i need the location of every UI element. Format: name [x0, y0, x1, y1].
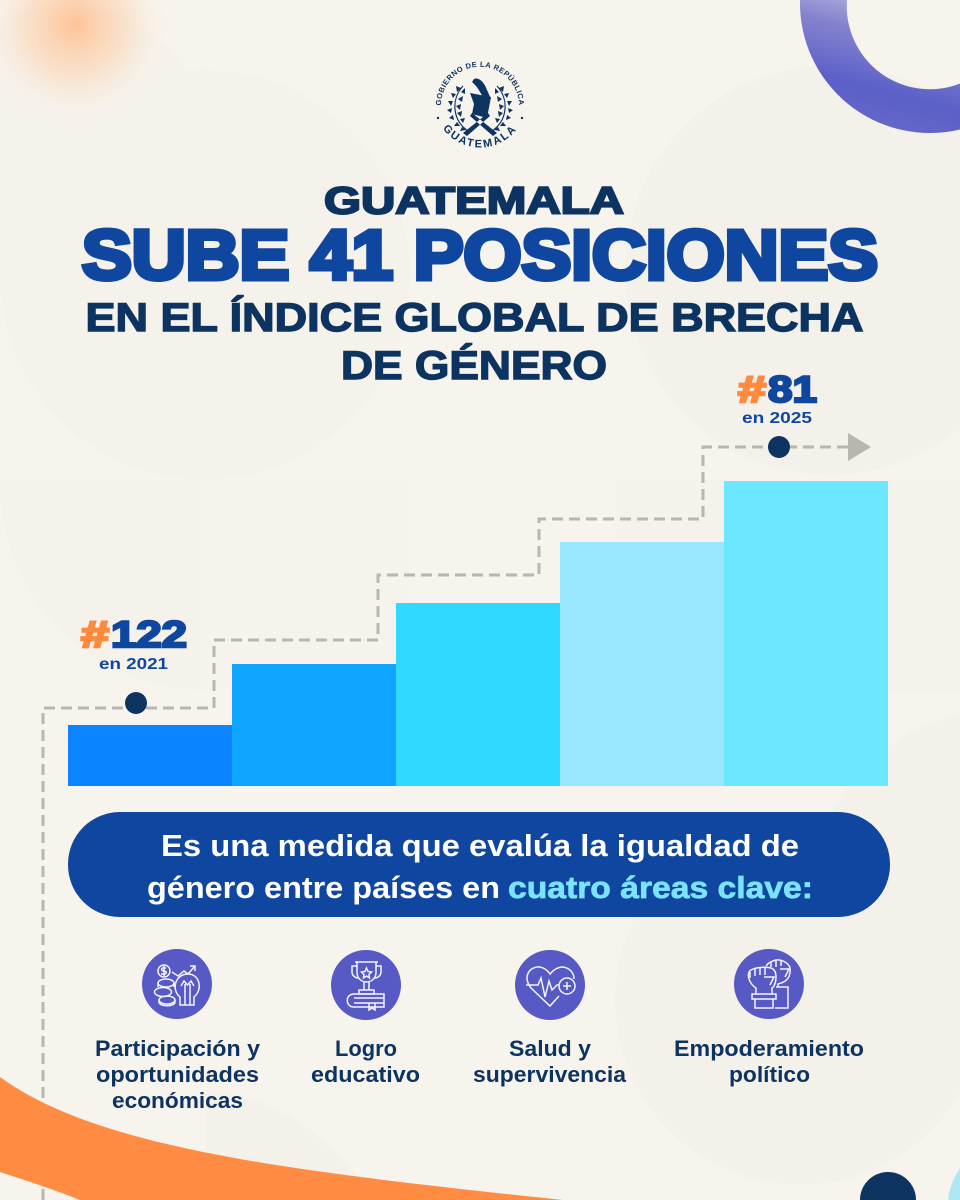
decoration: orange swoosh	[0, 1077, 563, 1200]
marker: end dot	[768, 436, 790, 458]
callout text: cuatro áreas clave:	[508, 870, 813, 905]
decoration: navy circle	[860, 1172, 916, 1200]
icon: trophy and book	[331, 950, 401, 1020]
label: #81 in 2025: en 2025	[742, 410, 812, 427]
decoration: orange glow	[0, 0, 175, 125]
label: #122 in 2021: en 2021	[99, 656, 168, 673]
label: #122 in 2021: 122	[111, 614, 187, 655]
dashed stepped arrow	[43, 433, 871, 1200]
label: #81 in 2025: #	[738, 369, 766, 410]
logo text: bottom: GUATEMALA	[444, 125, 516, 148]
decoration: light blue corner	[948, 1168, 960, 1200]
label: politics: Empoderamiento	[674, 1036, 864, 1061]
callout text: género entre países en	[147, 870, 500, 905]
icon: coins and lightbulb	[142, 949, 212, 1019]
title line: GUATEMALA: GUATEMALA	[324, 180, 624, 222]
label: education	[311, 1036, 420, 1087]
decoration: purple ring	[800, 0, 960, 133]
logo: emblem	[447, 79, 513, 136]
label: health	[473, 1036, 627, 1087]
marker: start dot	[125, 692, 147, 714]
callout text	[147, 828, 813, 905]
label: economic participation: económicas	[112, 1088, 243, 1113]
icon: heart with pulse	[515, 950, 585, 1020]
icon: raised fists	[734, 949, 804, 1019]
label: politics	[674, 1036, 864, 1087]
label: health: supervivencia	[473, 1062, 627, 1087]
bar chart: rising steps	[68, 481, 888, 786]
label: education: educativo	[311, 1062, 420, 1087]
title line: SUBE 41 POSICIONES: SUBE 41 POSICIONES	[82, 216, 878, 294]
logo: coat of arms	[436, 62, 524, 148]
label: economic participation	[95, 1036, 261, 1113]
title line: DE GÉNERO: DE GÉNERO	[341, 343, 607, 388]
label: economic participation: oportunidades	[96, 1062, 259, 1087]
logo text: top: GOBIERNO DE LA REPÚBLICA	[436, 62, 524, 106]
label: #122 in 2021: #	[81, 614, 109, 655]
callout text: Es una medida que evalúa la igualdad de	[161, 828, 799, 863]
label: #81 in 2025: 81	[768, 369, 817, 410]
label: economic participation: Participación y	[95, 1036, 261, 1061]
label: health: Salud y	[509, 1036, 592, 1061]
label: education: Logro	[335, 1036, 397, 1061]
label group: four areas	[95, 1036, 864, 1113]
title line: EN EL ÍNDICE GLOBAL DE BRECHA: EN EL ÍNDICE GLOBAL DE BRECHA	[86, 295, 864, 340]
label: #81 in 2025	[738, 369, 817, 427]
title	[82, 180, 878, 388]
callout pill	[68, 812, 890, 917]
label: politics: político	[729, 1062, 810, 1087]
label: #122 in 2021	[81, 614, 187, 673]
